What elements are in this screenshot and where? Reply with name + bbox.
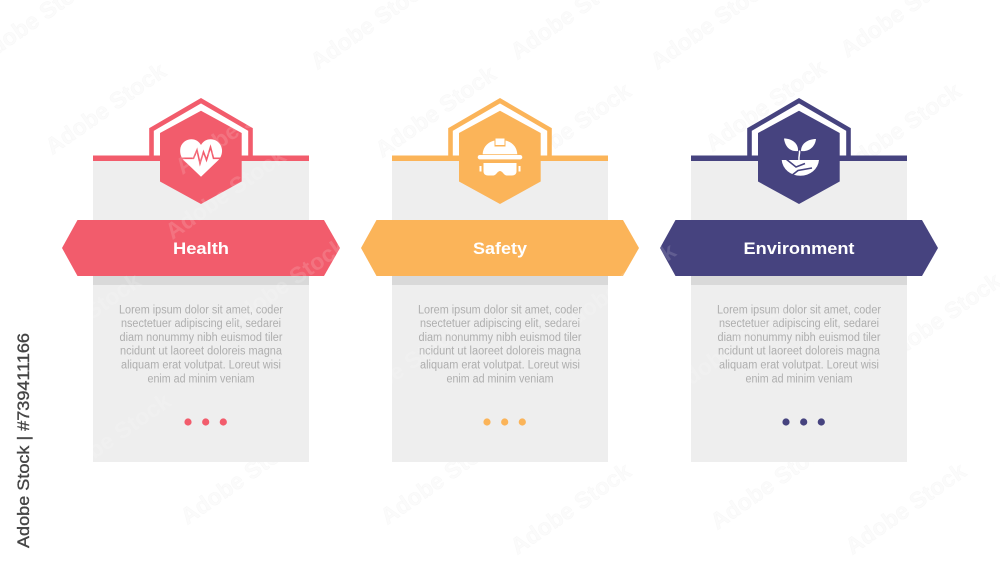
body text: nsectetuer adipiscing elit, sedarei (121, 318, 281, 330)
icon: hard hat and goggles (478, 138, 522, 176)
hexagon badge (160, 111, 242, 204)
panel: environment (660, 101, 938, 462)
body text: nsectetuer adipiscing elit, sedarei (719, 318, 879, 330)
hexagon outline (450, 101, 550, 161)
body text: ncidunt ut laoreet doloreis magna (419, 346, 582, 358)
body text: aliquam erat volutpat. Loreut wisi (121, 360, 281, 372)
heading: Safety (473, 240, 528, 258)
watermarks over cards: Adobe Stock (160, 142, 291, 244)
panel: health (62, 101, 340, 462)
watermarks over cards (15, 77, 796, 489)
watermarks over cards: Adobe Stock (550, 237, 681, 339)
body text: aliquam erat volutpat. Loreut wisi (420, 360, 580, 372)
top rule (93, 156, 309, 161)
body text: Lorem ipsum dolor sit amet, coder (418, 304, 582, 316)
watermarks over cards: Adobe Stock (15, 267, 146, 369)
watermarks on background: Adobe Stock (840, 457, 971, 559)
banner shadow (93, 276, 309, 285)
watermarks over cards: Adobe Stock (45, 387, 176, 489)
watermarks over cards: Adobe Stock (170, 77, 301, 179)
card background (691, 156, 907, 462)
watermarks on background: Adobe Stock (505, 77, 636, 179)
watermarks on background: Adobe Stock (700, 54, 831, 156)
banner (361, 220, 639, 276)
banner shadow (392, 276, 608, 285)
pagination dots (483, 418, 526, 426)
watermarks on background: Adobe Stock (375, 427, 506, 529)
body text (418, 304, 582, 385)
hexagon badge (758, 111, 840, 204)
pagination dots (782, 418, 825, 426)
heading: Environment (744, 240, 855, 258)
top rule (392, 156, 608, 161)
body text: Lorem ipsum dolor sit amet, coder (119, 304, 283, 316)
hexagon outline (152, 101, 250, 161)
card background (392, 156, 608, 462)
watermarks over cards: Adobe Stock (665, 297, 796, 399)
body text: diam nonummy nibh euismod tiler (418, 332, 582, 344)
body text (119, 304, 283, 385)
hexagon outline (750, 101, 848, 161)
watermarks on background: Adobe Stock (175, 427, 306, 529)
watermarks on background: Adobe Stock (505, 457, 636, 559)
heading: Health (173, 240, 229, 258)
body text: enim ad minim veniam (746, 373, 852, 385)
watermarks over cards: Adobe Stock (335, 317, 466, 419)
body text: enim ad minim veniam (148, 373, 254, 385)
body text: Lorem ipsum dolor sit amet, coder (717, 304, 881, 316)
body text (717, 304, 881, 385)
banner (62, 220, 340, 276)
watermarks on background: Adobe Stock (40, 57, 171, 159)
body text: diam nonummy nibh euismod tiler (718, 332, 881, 344)
icon: heart with pulse (178, 139, 224, 177)
watermarks on background: Adobe Stock (370, 60, 501, 162)
watermarks on background: Adobe Stock (705, 432, 836, 534)
banner (660, 220, 938, 276)
body text: ncidunt ut laoreet doloreis magna (120, 346, 283, 358)
watermarks over cards: Adobe Stock (220, 232, 351, 334)
panel: safety (361, 101, 639, 462)
body text: ncidunt ut laoreet doloreis magna (718, 346, 881, 358)
watermarks on background: Adobe Stock (835, 77, 966, 179)
stock image credit: Adobe Stock | #739411166 (14, 333, 33, 548)
banner shadow (691, 276, 907, 285)
body text: enim ad minim veniam (446, 373, 554, 385)
body text: nsectetuer adipiscing elit, sedarei (420, 318, 580, 330)
icon: plant in hand (782, 138, 819, 176)
body text: aliquam erat volutpat. Loreut wisi (719, 360, 879, 372)
pagination dots (184, 418, 227, 426)
hexagon badge (459, 111, 541, 204)
body text: diam nonummy nibh euismod tiler (120, 332, 283, 344)
top rule (691, 156, 907, 161)
card background (93, 156, 309, 462)
